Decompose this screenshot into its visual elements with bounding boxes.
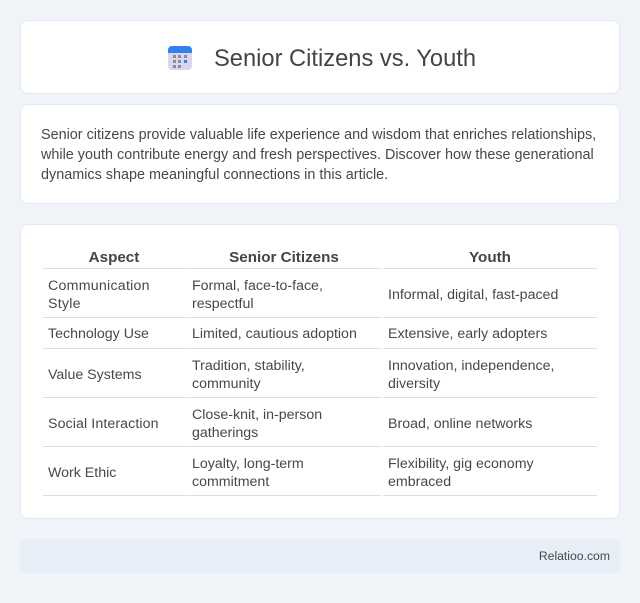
row: Work Ethic: Work Ethic — [48, 465, 116, 481]
cell: senior social: Close-knit, in-person — [192, 407, 322, 423]
row: Communication Style: Communication — [48, 278, 150, 294]
cell: senior work: Loyalty, long-term — [192, 456, 304, 472]
row: Value Systems: Value Systems — [48, 367, 142, 383]
cell: senior technology: Limited, cautious adoption — [192, 326, 357, 342]
cell: youth technology: Extensive, early adopters — [388, 326, 547, 342]
header: Youth: Youth — [469, 249, 511, 266]
cell: senior values: Tradition, stability, — [192, 358, 305, 374]
intro text: dynamics shape meaningful connections in this article. — [41, 167, 388, 183]
cell: senior communication — [192, 278, 323, 312]
cell: senior communication: Formal, face-to-face, — [192, 278, 323, 294]
header: Aspect: Aspect — [89, 249, 139, 266]
cell: senior values: community — [192, 376, 261, 392]
cell: youth work: embraced — [388, 474, 451, 490]
cell: youth values: Innovation, independence, — [388, 358, 554, 374]
intro panel — [20, 104, 620, 204]
footer credit: Relatioo.com — [539, 549, 610, 563]
cell: senior communication: respectful — [192, 296, 254, 312]
cell: youth work — [388, 456, 534, 490]
cell: youth values: diversity — [388, 376, 440, 392]
cell: senior work: commitment — [192, 474, 269, 490]
cell: youth work: Flexibility, gig economy — [388, 456, 534, 472]
header: Senior Citizens: Senior Citizens — [229, 249, 339, 266]
row: Social Interaction: Social Interaction — [48, 416, 159, 432]
row: Technology Use: Technology Use — [48, 326, 149, 342]
cell: youth values — [388, 358, 554, 392]
title: Senior Citizens vs. Youth — [214, 46, 476, 72]
title panel — [20, 20, 620, 94]
footer bar — [20, 539, 620, 573]
cell: youth social: Broad, online networks — [388, 416, 532, 432]
cell: senior social: gatherings — [192, 425, 258, 441]
intro text — [41, 127, 596, 183]
cell: youth communication: Informal, digital, fast-paced — [388, 287, 558, 303]
row: Communication Style — [48, 278, 150, 312]
icon: calendar — [168, 46, 192, 70]
cell: senior social — [192, 407, 322, 441]
cell: senior work — [192, 456, 304, 490]
intro text: Senior citizens provide valuable life experience and wisdom that enriches relationships, — [41, 127, 596, 143]
cell: senior values — [192, 358, 305, 392]
table panel — [20, 224, 620, 519]
row: Communication Style: Style — [48, 296, 81, 312]
intro text: while youth contribute energy and fresh perspectives. Discover how these generational — [41, 147, 594, 163]
